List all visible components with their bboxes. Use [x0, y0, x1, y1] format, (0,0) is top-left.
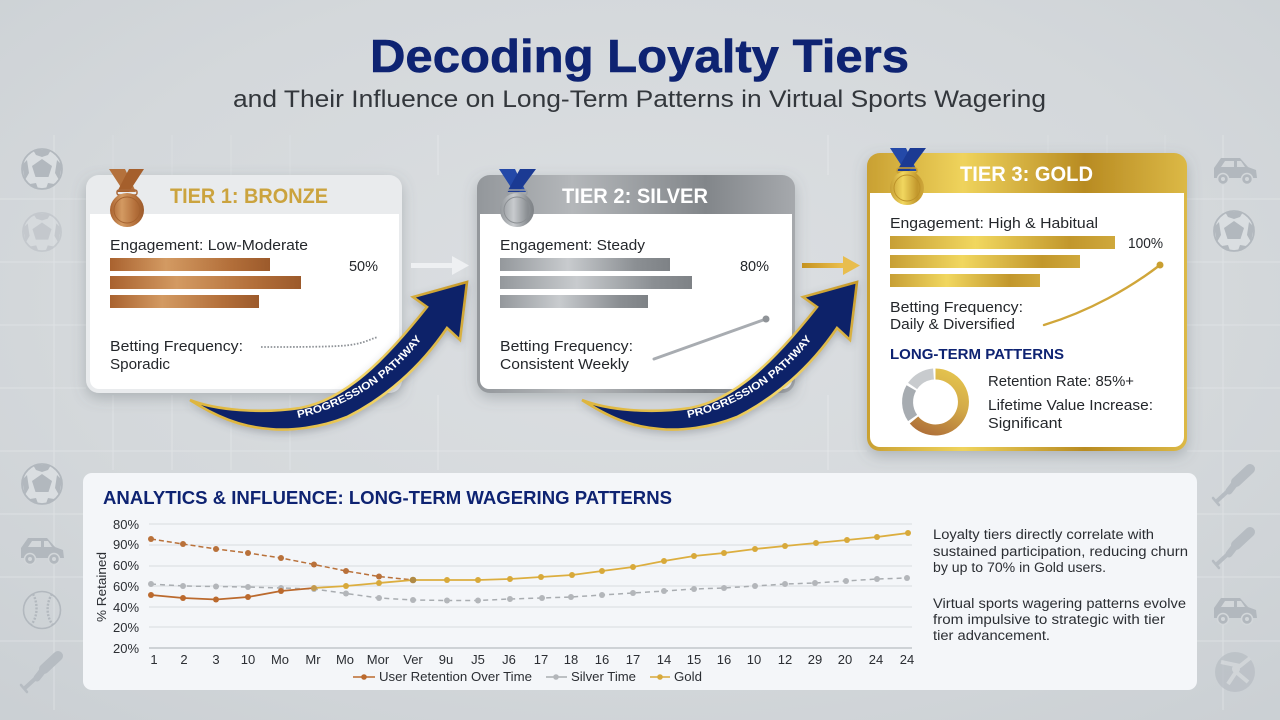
- x axis labels: Mor: [367, 652, 390, 667]
- x axis labels: 24: [900, 652, 914, 667]
- panel: tier 1 bronze: [86, 169, 402, 393]
- tier 2 heading: TIER 2: SILVER: [562, 185, 708, 208]
- x axis labels: Mo: [271, 652, 289, 667]
- engagement label: Engagement: Low-Moderate: [110, 237, 308, 254]
- tier 3 heading: TIER 3: GOLD: [960, 163, 1093, 186]
- x axis labels: 10: [241, 652, 255, 667]
- series: silver dashed: [148, 575, 910, 604]
- y axis labels: 60%: [113, 579, 139, 594]
- x axis labels: 15: [687, 652, 701, 667]
- arrow: silver to gold: [802, 256, 860, 275]
- y axis labels: 80%: [113, 517, 139, 532]
- x axis labels: 14: [657, 652, 671, 667]
- x axis labels: 16: [595, 652, 609, 667]
- icon: soccer ball, upper left: [22, 149, 62, 189]
- x axis labels: 24: [869, 652, 883, 667]
- x axis labels: Ver: [403, 652, 423, 667]
- icon: bat, lower right 1: [1213, 469, 1250, 505]
- x axis labels: 18: [564, 652, 578, 667]
- insight: churn: Loyalty tiers directly correlate with: [933, 527, 1154, 542]
- steady trend line: [654, 316, 770, 359]
- long-term patterns heading: LONG-TERM PATTERNS: [890, 346, 1064, 363]
- chart legend: Silver Time: [571, 669, 636, 684]
- y axis title: % Retained: [94, 552, 109, 622]
- progression arrow 2: [581, 280, 861, 437]
- y axis labels: 90%: [113, 537, 139, 552]
- long-term stats: Retention Rate: 85%+: [988, 373, 1134, 390]
- 50 percent value: 50%: [349, 258, 378, 275]
- chart legend: User Retention Over Time: [379, 669, 532, 684]
- panel: tier 3 gold: [867, 148, 1187, 451]
- betting frequency text: Sporadic: [110, 356, 171, 373]
- x axis labels: Mr: [305, 652, 321, 667]
- insight: churn: by up to 70% in Gold users.: [933, 560, 1106, 575]
- x axis labels: 9u: [439, 652, 453, 667]
- engagement bars: [500, 258, 692, 308]
- betting frequency text: Daily & Diversified: [890, 316, 1015, 333]
- x axis labels: 29: [808, 652, 822, 667]
- engagement label: Engagement: High & Habitual: [890, 215, 1098, 232]
- icon: baseball, left: [24, 592, 60, 628]
- x axis labels: J6: [502, 652, 516, 667]
- panel: analytics: [83, 473, 1197, 690]
- chart legend: Gold: [674, 669, 702, 684]
- x axis labels: 16: [717, 652, 731, 667]
- sporadic dotted trend line: [261, 337, 378, 347]
- progression label 1: PROGRESSION PATHWAY: [297, 334, 420, 418]
- y axis labels: 60%: [113, 558, 139, 573]
- x axis labels: 17: [626, 652, 640, 667]
- icon: faded wheel, lower right: [1215, 652, 1255, 692]
- chart legend: [353, 669, 702, 684]
- icon: faded soccer ball, left: [23, 213, 61, 251]
- progression arrow 1: [189, 280, 471, 437]
- y axis labels: 40%: [113, 600, 139, 615]
- x axis labels: J5: [471, 652, 485, 667]
- icon: soccer ball, right: [1214, 211, 1254, 251]
- betting frequency text: Betting Frequency:: [110, 338, 243, 355]
- icon: silver medal: [499, 169, 536, 227]
- 100 percent value: 100%: [1128, 235, 1163, 252]
- x axis labels: 2: [180, 652, 188, 667]
- long-term stats: Lifetime Value Increase:: [988, 397, 1153, 414]
- x axis labels: 17: [534, 652, 548, 667]
- arrow: bronze to silver: [411, 256, 469, 275]
- x axis labels: 3: [212, 652, 220, 667]
- icon: car, upper right: [1214, 158, 1257, 184]
- insight: churn: sustained participation, reducing churn: [933, 544, 1188, 559]
- title: Decoding Loyalty Tiers: [370, 30, 909, 82]
- x axis labels: 12: [778, 652, 792, 667]
- line chart: [94, 517, 914, 684]
- x axis labels: [150, 652, 914, 667]
- x axis labels: 1: [150, 652, 158, 667]
- insight: pattern evolution: Virtual sports wagering patterns evolve: [933, 596, 1186, 611]
- series: gold solid: [311, 530, 911, 591]
- long-term stats: Significant: [988, 415, 1063, 432]
- betting frequency text: Consistent Weekly: [500, 356, 630, 373]
- insight: pattern evolution: tier advancement.: [933, 628, 1050, 643]
- betting frequency text: Betting Frequency:: [500, 338, 633, 355]
- x axis labels: 10: [747, 652, 761, 667]
- 80 percent value: 80%: [740, 258, 769, 275]
- y axis labels: 20%: [113, 641, 139, 656]
- progression label 2: PROGRESSION PATHWAY: [687, 334, 810, 418]
- icon: soccer ball, lower left: [22, 464, 62, 504]
- engagement bars: [110, 258, 301, 308]
- icon: car, left: [21, 538, 64, 564]
- y axis labels: [113, 517, 139, 656]
- series: bronze dashed: [148, 536, 413, 580]
- panel: tier 2 silver: [477, 169, 795, 393]
- series: bronze solid start: [148, 588, 314, 602]
- habitual trend line: [1044, 262, 1164, 325]
- engagement bars: [890, 236, 1115, 287]
- icon: bat, lower right 2: [1213, 532, 1250, 568]
- x axis labels: Mo: [336, 652, 354, 667]
- insight: pattern evolution: from impulsive to strategic with tier: [933, 612, 1166, 627]
- analytics heading: ANALYTICS & INFLUENCE: LONG-TERM WAGERING PATTERNS: [103, 488, 672, 508]
- donut chart: [908, 374, 963, 430]
- subtitle: and Their Influence on Long-Term Patterns in Virtual Sports Wagering: [233, 86, 1046, 113]
- engagement label: Engagement: Steady: [500, 237, 646, 254]
- x axis labels: 20: [838, 652, 852, 667]
- icon: bat, left: [21, 656, 58, 692]
- y axis labels: 20%: [113, 620, 139, 635]
- icon: bronze medal: [109, 169, 144, 227]
- icon: car, lower right: [1214, 598, 1257, 624]
- icon: gold medal: [890, 148, 926, 205]
- betting frequency text: Betting Frequency:: [890, 299, 1023, 316]
- tier 1 heading: TIER 1: BRONZE: [170, 185, 328, 208]
